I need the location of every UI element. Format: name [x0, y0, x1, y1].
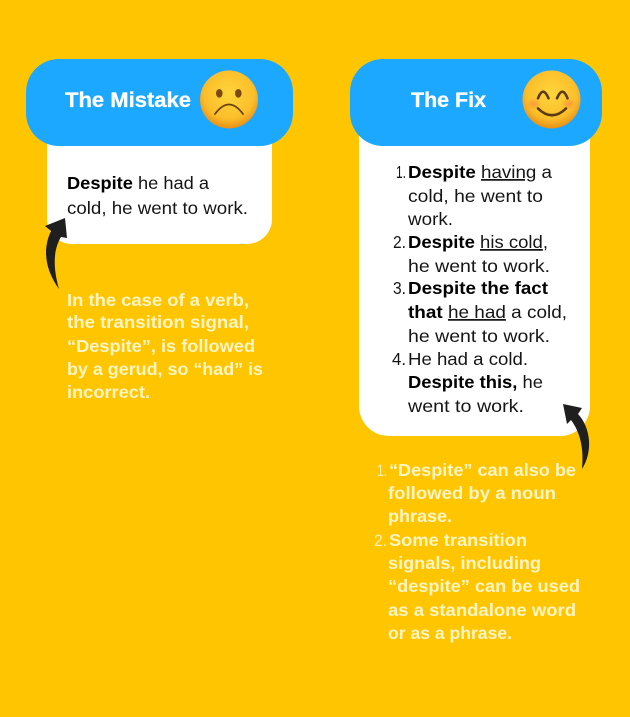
mistake explanation	[67, 290, 263, 402]
icon: sad face emoji	[200, 70, 258, 128]
numbered fix list: Despite this, he	[408, 372, 543, 392]
fix explanation numbered list: or as a phrase.	[388, 623, 512, 643]
mistake example text: Despite he had a	[67, 173, 209, 193]
fix explanation numbered list: followed by a noun	[388, 483, 556, 503]
fix explanation numbered list	[374, 460, 580, 643]
numbered fix list: work.	[407, 209, 453, 229]
numbered fix list: cold, he went to	[408, 186, 543, 206]
icon: smiling face emoji	[522, 70, 580, 128]
numbered fix list: Despite the fact	[408, 278, 548, 298]
fix explanation numbered list: 1.	[377, 462, 387, 480]
mistake explanation: incorrect.	[67, 382, 150, 402]
fix explanation numbered list: 2.	[374, 532, 387, 550]
arrow: fix	[563, 404, 589, 469]
fix explanation numbered list: phrase.	[388, 506, 452, 526]
numbered fix list: he went to work.	[408, 326, 550, 346]
panel: the fix	[350, 59, 602, 436]
fix explanation numbered list: Some transition	[389, 530, 527, 550]
numbered fix list: that he had a cold,	[408, 302, 567, 322]
fix example card	[359, 130, 590, 436]
numbered fix list	[392, 162, 567, 416]
mistake explanation: the transition signal,	[67, 312, 249, 332]
fix explanation numbered list: signals, including	[388, 553, 541, 573]
mistake example card	[47, 130, 272, 244]
fix header bar	[350, 59, 602, 146]
heading: the fix: The Fix	[411, 89, 486, 112]
arrow: mistake	[45, 218, 67, 289]
numbered fix list: 1.	[396, 162, 406, 182]
mistake example text	[67, 173, 248, 218]
heading: the mistake: The Mistake	[65, 89, 191, 112]
numbered fix list: went to work.	[407, 396, 524, 416]
numbered fix list: 3.	[393, 278, 406, 298]
mistake header bar	[26, 59, 293, 146]
numbered fix list: 4.	[392, 349, 406, 369]
mistake explanation: “Despite”, is followed	[67, 336, 255, 356]
mistake explanation: In the case of a verb,	[67, 290, 249, 310]
numbered fix list: 2.	[393, 232, 406, 252]
fix explanation numbered list: “despite” can be used	[388, 576, 580, 596]
numbered fix list: Despite his cold,	[408, 232, 548, 252]
mistake example text: cold, he went to work.	[67, 198, 248, 218]
fix explanation numbered list: as a standalone word	[388, 600, 576, 620]
mistake explanation: by a gerud, so “had” is	[67, 359, 263, 379]
numbered fix list: he went to work.	[408, 256, 550, 276]
panel: the mistake	[26, 59, 293, 244]
fix explanation numbered list: “Despite” can also be	[389, 460, 576, 480]
numbered fix list: He had a cold.	[408, 349, 528, 369]
numbered fix list: Despite having a	[408, 162, 552, 182]
